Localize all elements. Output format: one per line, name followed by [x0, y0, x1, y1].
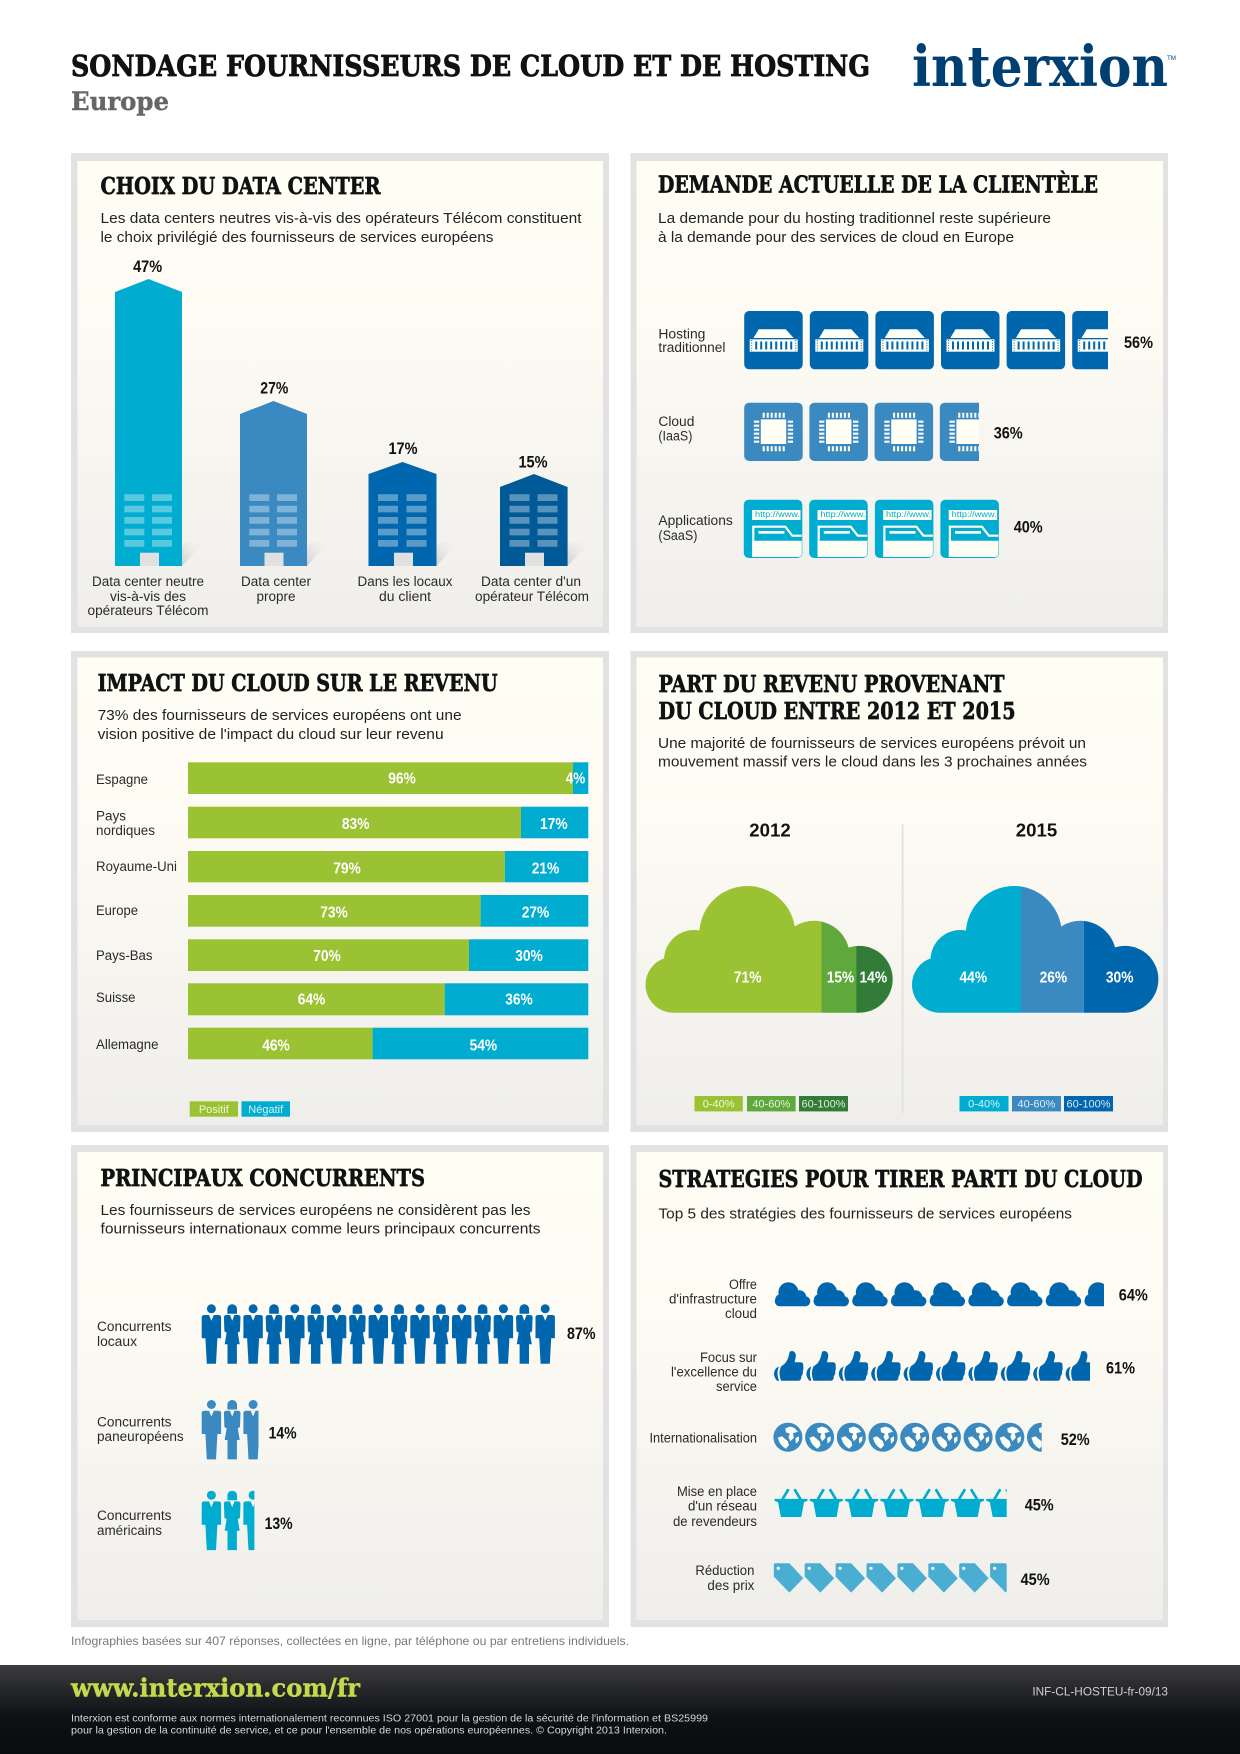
row: reduction des prix: Réduction — [695, 1563, 754, 1578]
pictogram: web apps: http://www. — [952, 509, 997, 519]
intro text: mouvement massif vers le cloud dans les 3 prochaines années — [658, 754, 1087, 770]
bar: Pays nordiques: nordiques — [96, 823, 155, 838]
cloud chart 2012: 71% — [734, 970, 762, 987]
row: concurrents paneuropeens — [97, 1400, 297, 1459]
bar: Espagne: 4% — [566, 770, 585, 787]
row: mise en place d'un reseau de revendeurs: Mise en place — [677, 1484, 757, 1499]
row: concurrents americains — [97, 1491, 293, 1550]
bar: Suisse: 36% — [505, 991, 533, 1008]
legend: Négatif — [248, 1104, 284, 1116]
row: focus sur l'excellence du service — [671, 1350, 1135, 1394]
legend 2012: 0-40% — [703, 1099, 735, 1111]
bar: 17% — [368, 440, 458, 566]
row: focus sur l'excellence du service: service — [716, 1379, 757, 1394]
legend — [190, 1101, 290, 1117]
row: applications saas: Applications — [658, 513, 733, 528]
bar labels: propre — [256, 589, 296, 604]
cloud chart 2015: 26% — [1040, 970, 1067, 987]
panel: part du revenu provenant du cloud — [630, 651, 1168, 1132]
bar: Pays nordiques: Pays — [96, 809, 126, 824]
heading: STRATEGIES POUR TIRER PARTI DU CLOUD — [658, 1166, 1142, 1193]
panel: choix du data center — [71, 153, 609, 633]
footer — [0, 1665, 1240, 1754]
cloud chart 2015: 44% — [960, 970, 987, 987]
intro text — [658, 735, 1087, 770]
row: concurrents locaux — [97, 1304, 596, 1364]
bar labels: Data center — [241, 574, 311, 589]
logo: interxion: interxion — [912, 34, 1168, 100]
pictogram: web apps: http://www. — [820, 509, 865, 519]
pictogram: servers — [744, 311, 1131, 369]
heading: DEMANDE ACTUELLE DE LA CLIENTÈLE — [658, 172, 1098, 199]
bar: Royaume-Uni: 79% — [333, 861, 361, 878]
row: mise en place d'un reseau de revendeurs: d'un réseau — [688, 1499, 757, 1514]
pictogram: people — [202, 1304, 555, 1364]
bar: Pays nordiques — [96, 807, 588, 838]
bar: Europe — [96, 895, 588, 927]
pictogram: chips — [744, 403, 998, 461]
row: hosting traditionnel: traditionnel — [658, 340, 725, 355]
pictogram: web apps: http://www. — [886, 509, 931, 519]
row: cloud iaas: (IaaS) — [658, 429, 692, 444]
row: concurrents paneuropeens: 14% — [269, 1424, 297, 1442]
legend: Positif — [199, 1104, 230, 1116]
heading: CHOIX DU DATA CENTER — [100, 173, 381, 200]
pictogram: web apps — [744, 500, 999, 558]
row: cloud iaas — [658, 403, 1023, 461]
heading — [658, 671, 1016, 725]
bar labels: Data center neutre — [92, 574, 204, 589]
pictogram: thumbs up — [774, 1351, 1095, 1381]
cloud chart 2015: 30% — [1106, 970, 1133, 987]
pictogram: web apps: http://www. — [755, 509, 800, 519]
row: focus sur l'excellence du service: 61% — [1106, 1359, 1135, 1377]
row: reduction des prix: des prix — [707, 1578, 755, 1593]
intro text: Les data centers neutres vis-à-vis des opérateurs Télécom constituent — [100, 210, 582, 227]
cloud chart 2012: 14% — [860, 970, 887, 987]
pictogram: people — [202, 1490, 254, 1550]
row: mise en place d'un reseau de revendeurs: 45% — [1025, 1497, 1054, 1515]
row: focus sur l'excellence du service: l'excellence du — [671, 1364, 757, 1379]
bar labels: opérateurs Télécom — [88, 603, 208, 618]
legal text: Interxion est conforme aux normes internationalement reconnues ISO 27001 pour la gestion de la sécurité de l'information et BS25999 — [71, 1713, 708, 1725]
row: concurrents paneuropeens: paneuropéens — [97, 1429, 184, 1444]
intro text: 73% des fournisseurs de services européens ont une — [98, 707, 462, 724]
bar: Suisse: 64% — [298, 991, 325, 1008]
heading: DU CLOUD ENTRE 2012 ET 2015 — [658, 698, 1016, 725]
bar labels: Dans les locaux — [358, 574, 453, 589]
bar labels — [88, 574, 589, 618]
bar: Espagne: Espagne — [96, 772, 148, 787]
row: applications saas: 40% — [1014, 518, 1043, 536]
bar: 15% — [500, 453, 590, 566]
legend 2015: 40-60% — [1018, 1099, 1056, 1111]
pictogram: people — [202, 1400, 263, 1459]
bar: Allemagne — [96, 1028, 588, 1059]
panel: strategies pour tirer parti du cloud — [630, 1145, 1168, 1627]
row: offre d'infrastructure cloud: d'infrastructure — [669, 1291, 757, 1306]
row: mise en place d'un reseau de revendeurs — [674, 1486, 1054, 1526]
row: offre d'infrastructure cloud: Offre — [729, 1277, 757, 1292]
bar: Pays nordiques: 83% — [342, 816, 370, 833]
row: mise en place d'un reseau de revendeurs: de revendeurs — [673, 1514, 757, 1529]
legend 2015: 60-100% — [1066, 1099, 1111, 1111]
bar labels: du client — [379, 589, 431, 604]
intro text: Les fournisseurs de services européens ne considèrent pas les — [100, 1202, 530, 1219]
bar: 27%: 27% — [260, 379, 289, 397]
intro text: à la demande pour des services de cloud en Europe — [658, 229, 1014, 246]
pictogram: globes — [773, 1423, 1056, 1452]
bar: 47%: 47% — [133, 258, 162, 276]
bar labels: Data center d'un — [481, 574, 581, 589]
legend 2012: 40-60% — [752, 1099, 790, 1111]
intro text: fournisseurs internationaux comme leurs principaux concurrents — [100, 1220, 540, 1238]
row: hosting traditionnel: Hosting — [658, 326, 705, 341]
bar: Suisse: Suisse — [96, 990, 136, 1005]
bar: Suisse — [96, 983, 588, 1015]
row: internationalisation — [650, 1423, 1090, 1452]
legend 2012: 60-100% — [801, 1099, 846, 1111]
row: concurrents locaux: Concurrents — [97, 1319, 172, 1334]
logo: interxion: TM — [1167, 55, 1176, 62]
bar: 15%: 15% — [518, 453, 548, 471]
bar: 17%: 17% — [388, 440, 418, 458]
footer url: www.interxion.com/fr — [70, 1674, 361, 1703]
cloud chart 2015: 2015 — [1016, 821, 1057, 841]
row: concurrents locaux: locaux — [97, 1334, 137, 1349]
intro text: Une majorité de fournisseurs de services européens prévoit un — [658, 735, 1086, 752]
row: concurrents americains: 13% — [265, 1515, 293, 1533]
building chart — [115, 258, 590, 566]
legal text: pour la gestion de la continuité de service, et ce pour l'ensemble de nos opérations européennes. © Copyright 2013 Interxion. — [71, 1724, 667, 1736]
intro text: La demande pour du hosting traditionnel reste supérieure — [658, 210, 1051, 227]
heading: PRINCIPAUX CONCURRENTS — [100, 1165, 425, 1192]
legend 2012 — [694, 1096, 848, 1111]
bar: Pays-Bas: 30% — [515, 948, 543, 965]
intro text — [98, 707, 462, 743]
footnote: Infographies basées sur 407 réponses, collectées en ligne, par téléphone ou par entretiens individuels. — [71, 1634, 629, 1648]
legal text — [71, 1713, 708, 1736]
row: offre d'infrastructure cloud: 64% — [1119, 1287, 1148, 1305]
intro text: vision positive de l'impact du cloud sur leur revenu — [98, 726, 444, 743]
row: applications saas: (SaaS) — [658, 528, 697, 543]
row: concurrents americains: Concurrents — [97, 1508, 172, 1523]
intro text — [100, 1202, 540, 1238]
row: offre d'infrastructure cloud — [670, 1279, 1148, 1318]
bar: Allemagne: Allemagne — [96, 1037, 158, 1052]
bar: Royaume-Uni: Royaume-Uni — [96, 859, 177, 874]
intro text — [100, 210, 582, 246]
subtitle: Europe: Europe — [71, 87, 169, 116]
intro text: Top 5 des stratégies des fournisseurs de services européens — [658, 1206, 1072, 1223]
bar: 47% — [115, 258, 204, 566]
row: reduction des prix — [695, 1563, 1050, 1593]
row: hosting traditionnel — [658, 311, 1153, 369]
cloud chart 2012: 2012 — [749, 821, 791, 841]
document reference: INF-CL-HOSTEU-fr-09/13 — [1032, 1685, 1168, 1699]
row: cloud iaas: Cloud — [658, 414, 694, 429]
bar: Allemagne: 46% — [262, 1038, 290, 1055]
row: focus sur l'excellence du service: Focus sur — [700, 1350, 757, 1365]
stacked bar chart — [96, 762, 588, 1059]
heading: IMPACT DU CLOUD SUR LE REVENU — [98, 670, 498, 697]
pictogram: baskets — [774, 1489, 1019, 1517]
panel: impact du cloud sur le revenu — [71, 651, 609, 1132]
bar: Europe: 27% — [522, 905, 549, 922]
row: offre d'infrastructure cloud: cloud — [725, 1306, 757, 1321]
bar: Royaume-Uni: 21% — [532, 861, 559, 878]
bar: Pays nordiques: 17% — [540, 816, 568, 833]
panel: demande actuelle de la clientele — [630, 153, 1168, 633]
cloud chart 2012: 15% — [827, 970, 854, 987]
bar: 27% — [240, 379, 329, 566]
bar: Pays-Bas: 70% — [313, 948, 341, 965]
row: concurrents paneuropeens: Concurrents — [97, 1415, 172, 1430]
row: hosting traditionnel: 56% — [1124, 334, 1153, 352]
row: cloud iaas: 36% — [994, 424, 1023, 442]
intro text — [658, 210, 1051, 246]
row: reduction des prix: 45% — [1021, 1571, 1050, 1589]
bar labels: vis-à-vis des — [110, 589, 186, 604]
bar: Europe: 73% — [320, 905, 348, 922]
bar: Allemagne: 54% — [470, 1038, 497, 1055]
row: applications saas — [658, 500, 1043, 558]
bar: Royaume-Uni — [96, 851, 588, 882]
legend 2015: 0-40% — [968, 1099, 1000, 1111]
bar: Espagne — [96, 762, 588, 794]
title: SONDAGE FOURNISSEURS DE CLOUD ET DE HOSTING — [71, 49, 870, 83]
heading: PART DU REVENU PROVENANT — [658, 671, 1004, 698]
bar: Pays-Bas: Pays-Bas — [96, 948, 153, 963]
bar: Pays-Bas — [96, 939, 588, 971]
row: internationalisation: Internationalisation — [650, 1430, 757, 1445]
cloud chart 2015 — [905, 821, 1164, 1020]
bar labels: opérateur Télécom — [475, 589, 589, 604]
pictogram: price tags — [774, 1563, 1020, 1593]
cloud chart 2012 — [640, 821, 896, 1020]
pictogram: clouds — [775, 1282, 1120, 1306]
intro text: le choix privilégié des fournisseurs de services européens — [100, 229, 494, 246]
bar: Europe: Europe — [96, 903, 138, 918]
row: concurrents americains: américains — [97, 1523, 162, 1538]
row: internationalisation: 52% — [1061, 1431, 1090, 1449]
legend 2015 — [960, 1096, 1113, 1111]
bar: Espagne: 96% — [388, 770, 416, 787]
panel: principaux concurrents — [71, 1145, 609, 1627]
row: concurrents locaux: 87% — [567, 1325, 596, 1343]
